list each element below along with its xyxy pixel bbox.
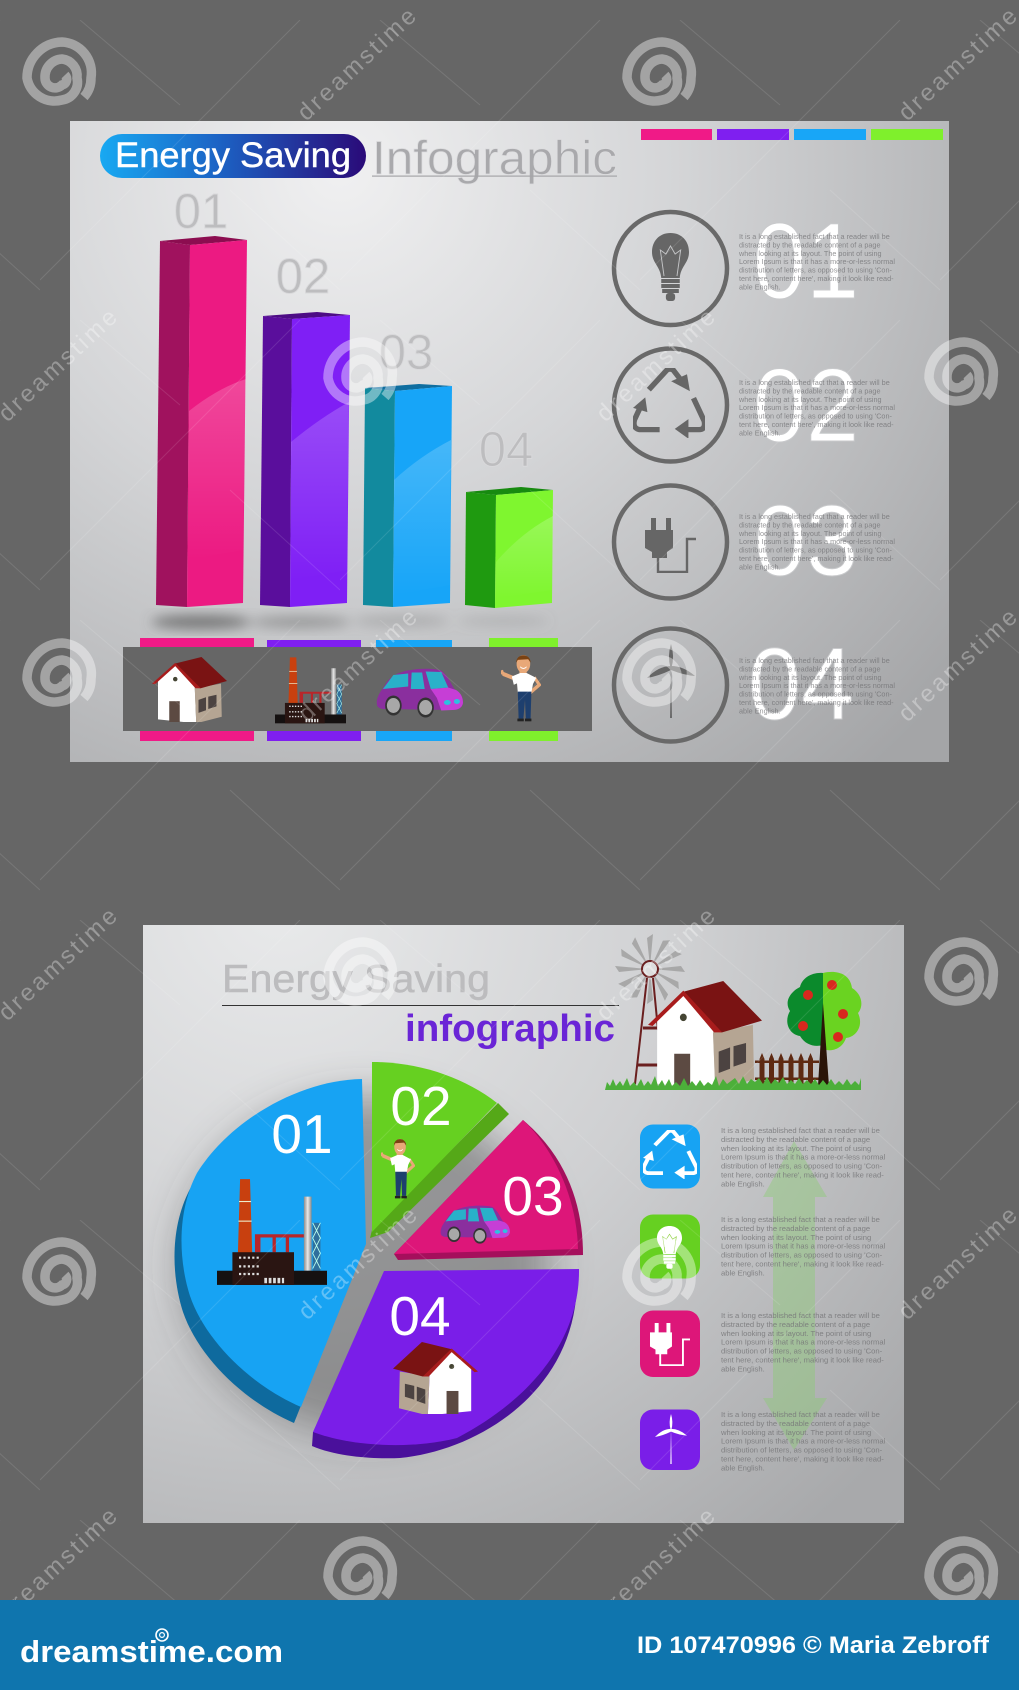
text block turbine: Lorem Ipsum is that it has a more-or-less normal: [721, 1437, 886, 1446]
text block turbine: when looking at its layout. The point of using: [720, 1428, 871, 1437]
large white numerals: 01: [753, 200, 859, 321]
footer bar: [0, 1600, 1019, 1690]
color legend strips: [641, 129, 943, 140]
icon: house: [152, 657, 227, 723]
text block 03: distribution of letters, as opposed to using 'Con-: [739, 546, 893, 555]
text block plug: Lorem Ipsum is that it has a more-or-less normal: [721, 1338, 886, 1347]
text block plug: able English.: [721, 1364, 765, 1373]
pie numbers: 03: [502, 1165, 564, 1227]
icon: wind turbine in circle: [614, 628, 727, 742]
slice 01: [174, 1079, 366, 1423]
fence: [755, 1053, 819, 1084]
bar 04: [465, 487, 553, 608]
slice 04: [312, 1269, 579, 1458]
text block plug: distribution of letters, as opposed to using 'Con-: [721, 1347, 883, 1356]
text block recycle: Lorem Ipsum is that it has a more-or-less normal: [721, 1153, 886, 1162]
text block 01: when looking at its layout. The point of using: [738, 249, 882, 258]
pie shadow: [180, 1095, 550, 1435]
text block recycle: distribution of letters, as opposed to using 'Con-: [721, 1162, 883, 1171]
text block 01: tent here, content here', making it look like read-: [739, 274, 894, 283]
bar chart: [156, 236, 553, 608]
house: [648, 981, 762, 1090]
bar shadows: [151, 615, 549, 629]
title pill: Energy Saving: Energy Saving: [115, 136, 351, 175]
icon: man on slice 02: [381, 1139, 414, 1198]
pie numbers: 02: [390, 1075, 452, 1137]
bar number labels: 02: [276, 250, 330, 304]
text block 01: distracted by the readable content of a page: [739, 240, 880, 249]
text block recycle: when looking at its layout. The point of using: [720, 1144, 871, 1153]
watermark text: dreamstime: [893, 3, 1019, 126]
large white numerals: [748, 200, 859, 741]
watermark text: dreamstime: [293, 604, 423, 727]
text block 03: when looking at its layout. The point of using: [738, 529, 882, 538]
footer logo: dreamstime.com: dreamstime.com: [20, 1634, 283, 1669]
icon: man: [501, 655, 539, 721]
text block turbine: It is a long established fact that a reader will be: [721, 1410, 880, 1419]
text block bulb: It is a long established fact that a reader will be: [721, 1215, 880, 1224]
text block 02: able English.: [739, 428, 781, 437]
text block 04: It is a long established fact that a reader will be: [739, 656, 890, 665]
text block turbine: able English.: [721, 1463, 765, 1472]
text block 03: distracted by the readable content of a page: [739, 520, 880, 529]
text block 04: distribution of letters, as opposed to using 'Con-: [739, 690, 893, 699]
slice 03: [394, 1120, 583, 1260]
text block turbine: tent here, content here', making it look like read-: [721, 1454, 884, 1464]
icon strip with colored tabs: [123, 638, 592, 741]
icon: recycle tile: [640, 1124, 700, 1188]
text block 04: distracted by the readable content of a page: [739, 664, 880, 673]
slice 02: [370, 1062, 509, 1238]
heading: Energy Saving: Energy Saving: [222, 958, 490, 1001]
text block plug: tent here, content here', making it look like read-: [721, 1356, 884, 1364]
watermark text: dreamstime: [591, 1503, 721, 1626]
large white numerals: 04: [748, 627, 854, 741]
icon: car on slice 03: [441, 1206, 510, 1244]
pie numbers: [271, 1075, 564, 1347]
bar number labels: [174, 185, 533, 477]
icon: recycle in circle: [614, 348, 727, 462]
large white numerals: 02: [753, 348, 859, 464]
text block recycle: It is a long established fact that a reader will be: [721, 1126, 880, 1135]
heading: infographic: infographic: [405, 1008, 615, 1050]
text block 02: tent here, content here', making it look like read-: [739, 420, 894, 429]
large white numerals: 03: [754, 485, 858, 597]
text block bulb: distribution of letters, as opposed to using 'Con-: [721, 1251, 883, 1260]
text block 01: It is a long established fact that a reader will be: [739, 232, 890, 241]
text block 02: distracted by the readable content of a page: [739, 386, 880, 395]
text block recycle: distracted by the readable content of a page: [721, 1135, 870, 1144]
icon: turbine tile: [640, 1410, 700, 1470]
heading: Infographic: Infographic: [372, 131, 617, 184]
text block 03: Lorem Ipsum is that it has a more-or-less normal: [739, 537, 895, 546]
watermark text: dreamstime: [591, 304, 721, 427]
icon: factory on slice 01: [217, 1179, 327, 1285]
text block 04: able English.: [739, 706, 781, 715]
bar number labels: 01: [174, 185, 228, 239]
pie numbers: 04: [389, 1285, 451, 1347]
text block 04: tent here, content here', making it look like read-: [739, 698, 894, 707]
pie chart: [174, 1062, 583, 1458]
text block bulb: Lorem Ipsum is that it has a more-or-less normal: [721, 1242, 886, 1251]
green double arrow: [763, 1141, 827, 1450]
text block bulb: tent here, content here', making it look like read-: [721, 1260, 884, 1268]
text block 01: able English.: [739, 282, 781, 291]
bar 01: [156, 236, 247, 607]
bar number labels: 03: [379, 326, 433, 380]
text block 04: Lorem Ipsum is that it has a more-or-less normal: [739, 681, 895, 690]
text block recycle: able English.: [721, 1179, 765, 1188]
text block 03: able English.: [739, 562, 781, 571]
icon: plug tile: [640, 1310, 700, 1377]
text block 03: It is a long established fact that a reader will be: [739, 512, 890, 521]
text block turbine: distracted by the readable content of a page: [721, 1419, 870, 1428]
text block recycle: tent here, content here', making it look like read-: [721, 1170, 884, 1180]
pie numbers: 01: [271, 1103, 333, 1165]
watermark text: dreamstime: [292, 3, 422, 126]
watermark text: dreamstime: [893, 1202, 1019, 1325]
heading rule: [222, 1005, 619, 1006]
bar number labels: 04: [479, 423, 533, 477]
text block 03: tent here, content here', making it look like read-: [739, 554, 894, 563]
text block plug: when looking at its layout. The point of using: [720, 1329, 871, 1338]
text block 01: distribution of letters, as opposed to using 'Con-: [739, 266, 893, 275]
icon: plug in circle: [614, 486, 727, 598]
icon: factory: [275, 657, 346, 723]
text block 02: It is a long established fact that a reader will be: [739, 378, 890, 387]
text block bulb: when looking at its layout. The point of using: [720, 1233, 871, 1242]
text block plug: It is a long established fact that a reader will be: [721, 1311, 880, 1320]
grass: [605, 1076, 861, 1090]
icon: car: [377, 669, 463, 718]
icon: house on slice 04: [393, 1342, 478, 1415]
text block bulb: able English.: [721, 1268, 765, 1277]
footer credit: ID 107470996 © Maria Zebroff: [637, 1632, 990, 1659]
illustration: windmill, house, fence, tree: [605, 934, 861, 1090]
windmill: [615, 934, 685, 1084]
icon: light bulb in circle: [614, 212, 727, 325]
panel: bar chart infographic: [70, 121, 949, 762]
text block plug: distracted by the readable content of a page: [721, 1320, 870, 1329]
text block 02: Lorem Ipsum is that it has a more-or-less normal: [739, 403, 895, 412]
icon: bulb tile: [640, 1214, 700, 1278]
text block turbine: distribution of letters, as opposed to using 'Con-: [721, 1446, 883, 1455]
text block 01: Lorem Ipsum is that it has a more-or-less normal: [739, 257, 895, 266]
watermark text: dreamstime: [591, 903, 721, 1026]
bar 02: [260, 312, 350, 607]
panel: pie chart infographic: [143, 925, 904, 1523]
text block 02: when looking at its layout. The point of using: [738, 395, 882, 404]
text block bulb: distracted by the readable content of a page: [721, 1224, 870, 1233]
watermark text: dreamstime: [893, 604, 1019, 727]
text block 04: when looking at its layout. The point of using: [738, 673, 882, 682]
text block 02: distribution of letters, as opposed to using 'Con-: [739, 412, 893, 421]
watermark text: dreamstime: [293, 1202, 423, 1325]
bar 03: [363, 384, 452, 607]
tree: [787, 972, 861, 1086]
